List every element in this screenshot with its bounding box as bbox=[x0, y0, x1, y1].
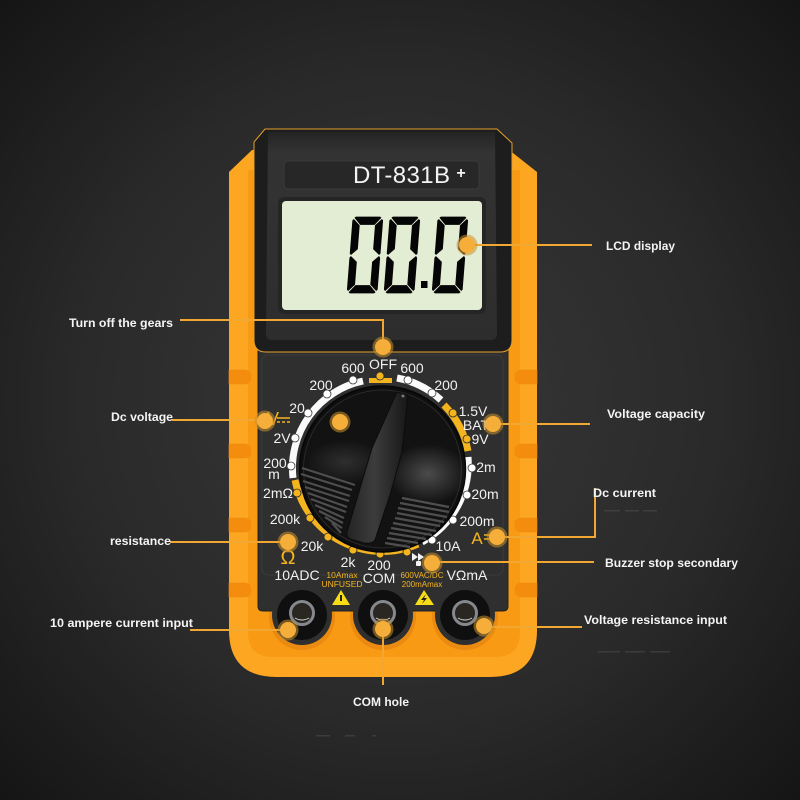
LCD digit bbox=[384, 217, 420, 293]
dial range labels: 10A bbox=[436, 538, 461, 554]
dial range labels: 10Amax bbox=[326, 570, 358, 580]
dial range labels: COM bbox=[363, 570, 395, 586]
dial range labels: VΩmA bbox=[447, 567, 488, 583]
dial range labels: 200mAmax bbox=[402, 580, 442, 589]
dial range labels: A bbox=[471, 529, 483, 548]
dial range labels: 600VAC/DC bbox=[401, 571, 444, 580]
callout: resistance: resistance bbox=[110, 534, 171, 548]
faint background smudges bbox=[316, 510, 670, 736]
LCD decimal point bbox=[421, 281, 428, 288]
LCD digit bbox=[347, 217, 383, 293]
LCD digit bbox=[432, 217, 468, 293]
dial range labels: OFF bbox=[369, 356, 397, 372]
LCD display bbox=[278, 197, 486, 314]
callout: Voltage capacity: Voltage capacity bbox=[607, 407, 705, 421]
selector scale ring bbox=[287, 372, 476, 558]
callout: Dc voltage: Dc voltage bbox=[111, 410, 173, 424]
callout: Dc voltage bbox=[111, 410, 276, 432]
icon: warning triangle bbox=[332, 590, 350, 605]
knob pointer handle bbox=[347, 392, 408, 543]
dial range labels: 200k bbox=[270, 511, 301, 527]
input jack: VΩmA bbox=[435, 585, 495, 645]
dial range labels: V bbox=[267, 409, 279, 429]
dial range labels: 1.5V bbox=[459, 403, 488, 419]
dial range labels: 200 bbox=[434, 377, 458, 393]
callout: Voltage capacity bbox=[482, 407, 705, 434]
model plate: DT-831B bbox=[353, 162, 450, 189]
callout: Dc current bbox=[486, 486, 656, 548]
callout: Buzzer stop secondary bbox=[422, 552, 738, 574]
dial range labels: BAT bbox=[463, 417, 490, 433]
icon: diode and buzzer symbols bbox=[412, 553, 424, 566]
dial range labels: 9V bbox=[471, 431, 489, 447]
dial range labels: m bbox=[268, 466, 280, 482]
dial range labels: 600 bbox=[400, 360, 424, 376]
marker: rotary knob bbox=[330, 412, 350, 432]
model plate bbox=[284, 161, 479, 189]
dial range labels: UNFUSED bbox=[321, 579, 363, 589]
dial range labels: 20m bbox=[471, 486, 499, 502]
dial panel bbox=[258, 350, 508, 611]
callout: Turn off the gears bbox=[69, 316, 394, 358]
callout: Turn off the gears: Turn off the gears bbox=[69, 316, 173, 330]
dial range labels: 20 bbox=[289, 400, 305, 416]
callout: Dc current: Dc current bbox=[593, 486, 656, 500]
multimeter orange body bbox=[229, 150, 537, 677]
icon: high voltage triangle bbox=[415, 590, 434, 605]
dial range labels: 2mΩ bbox=[263, 485, 293, 501]
dial range labels: 600 bbox=[341, 360, 365, 376]
dial range labels: 200 bbox=[263, 455, 287, 471]
display hood bbox=[254, 129, 512, 352]
dial range labels: 20k bbox=[301, 538, 324, 554]
dial range labels: 2V bbox=[273, 430, 291, 446]
callout: 10 ampere current input: 10 ampere current input bbox=[50, 616, 193, 630]
dial range labels: 200m bbox=[459, 513, 495, 529]
dial range labels: 200 bbox=[367, 557, 391, 573]
callout: Buzzer stop secondary: Buzzer stop secondary bbox=[605, 556, 738, 570]
callout: COM hole bbox=[353, 618, 409, 709]
callout: LCD display: LCD display bbox=[606, 239, 675, 253]
callout: Voltage resistance input bbox=[474, 613, 727, 636]
rotary knob bbox=[300, 386, 468, 552]
dial range labels: Ω bbox=[281, 547, 296, 569]
model plate: + bbox=[456, 165, 466, 182]
knob grip ridges bbox=[301, 468, 449, 547]
callout: resistance bbox=[110, 532, 298, 552]
callout: LCD display bbox=[456, 234, 675, 256]
callout: COM hole: COM hole bbox=[353, 695, 409, 709]
dial range labels: 2m bbox=[476, 459, 496, 475]
input jack: COM bbox=[353, 585, 413, 645]
dial range labels: 10ADC bbox=[274, 567, 320, 583]
callout: 10 ampere current input bbox=[50, 616, 298, 640]
dial range labels: 200 bbox=[309, 377, 333, 393]
dial range labels: 2k bbox=[341, 554, 356, 570]
callout: Voltage resistance input: Voltage resistance input bbox=[584, 613, 727, 627]
dial range labels bbox=[263, 356, 499, 589]
input jack: 10ADC bbox=[272, 585, 332, 645]
